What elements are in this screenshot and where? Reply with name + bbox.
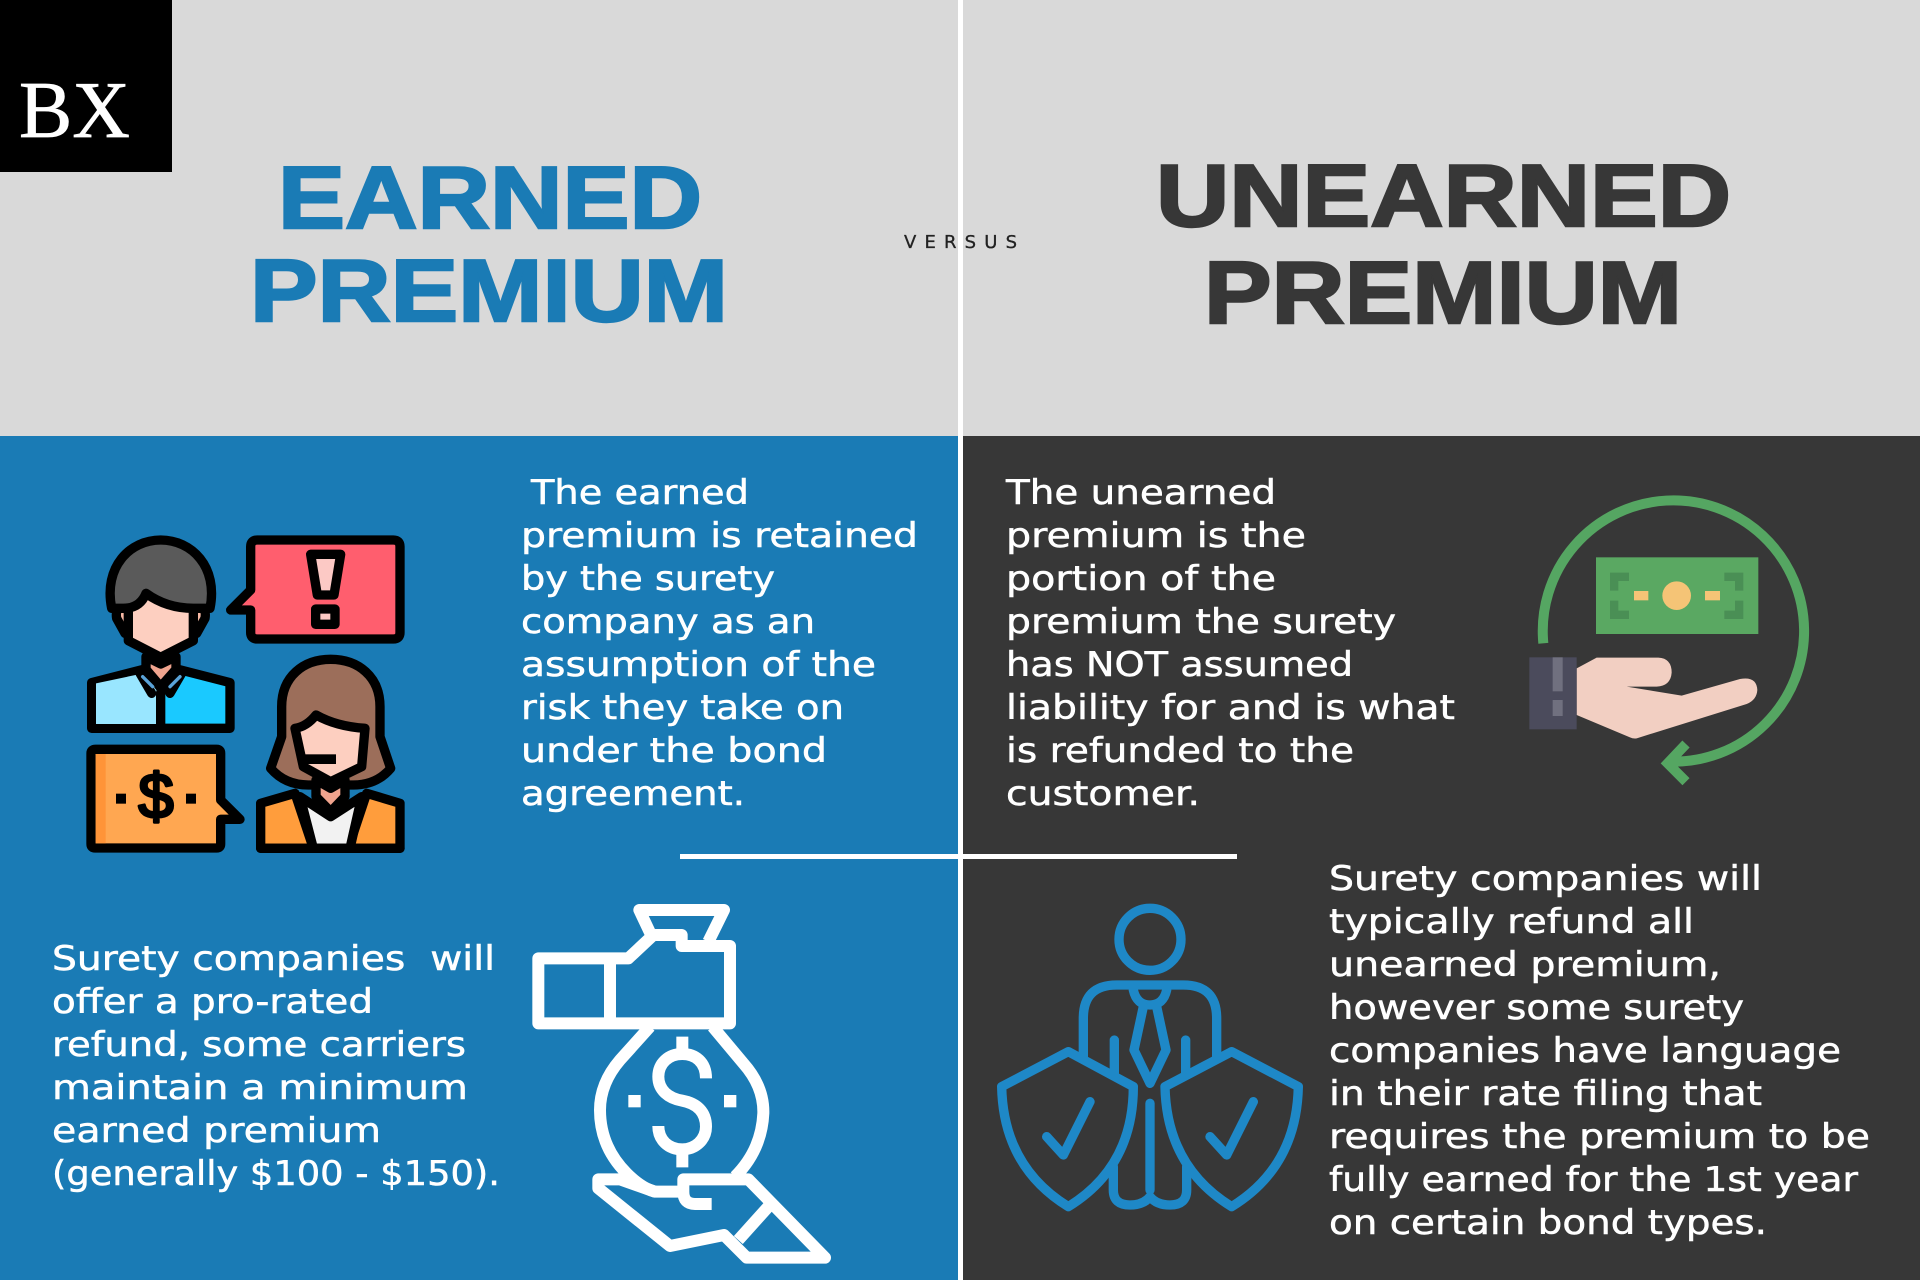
text block: unearned premium definition: liability for and is what [1006, 688, 1455, 728]
text block: earned premium retained: by the surety [521, 559, 775, 599]
text block: unearned premium definition: is refunded to the [1006, 731, 1354, 771]
icon: money bill in open hand with return arrow [1529, 500, 1804, 782]
header background [0, 0, 1920, 436]
text block: earned premium retained [521, 473, 918, 814]
text block: unearned premium definition: portion of the [1006, 559, 1276, 599]
logo: BX [0, 0, 172, 172]
panel: unearned premium [962, 436, 1920, 1280]
text block: pro-rated refund: maintain a minimum [52, 1068, 468, 1108]
text block: unearned premium definition: customer. [1006, 774, 1200, 814]
icon: money bag held between two hands [538, 910, 825, 1258]
heading: earned premium: PREMIUM [250, 241, 728, 340]
versus label: VERSUS [904, 232, 1017, 253]
icon: two people talking with speech bubbles: $ [138, 762, 174, 832]
text block: refund of unearned premium: companies have language [1329, 1031, 1841, 1071]
text block: pro-rated refund: earned premium [52, 1111, 381, 1151]
text block: pro-rated refund: Surety companies will [52, 939, 495, 979]
text block: refund of unearned premium: however some surety [1329, 988, 1744, 1028]
text block: earned premium retained: The earned [530, 473, 749, 513]
text block: refund of unearned premium: in their rate filing that [1329, 1074, 1762, 1114]
text block: earned premium retained: risk they take on [521, 688, 844, 728]
heading: earned premium [250, 148, 728, 340]
text block: pro-rated refund: offer a pro-rated [52, 982, 373, 1022]
text block: unearned premium definition: premium is the [1006, 516, 1306, 556]
text block: earned premium retained: premium is retained [521, 516, 918, 556]
text block: earned premium retained: agreement. [521, 774, 745, 814]
text block: pro-rated refund [52, 939, 500, 1194]
text block: refund of unearned premium: typically refund all [1329, 902, 1694, 942]
text block: unearned premium definition: has NOT assumed [1006, 645, 1353, 685]
heading: unearned premium: UNEARNED [1156, 146, 1731, 245]
heading: earned premium: EARNED [278, 148, 702, 247]
icon: businessman with two check shields [1002, 908, 1298, 1207]
text block: pro-rated refund: refund, some carriers [52, 1025, 466, 1065]
text block: refund of unearned premium: on certain bond types. [1329, 1203, 1767, 1243]
text block: earned premium retained: assumption of the [521, 645, 876, 685]
icon: two people talking with speech bubbles [91, 540, 400, 848]
text block: unearned premium definition [1005, 473, 1455, 814]
text block: refund of unearned premium: Surety companies will [1329, 859, 1762, 899]
text block: pro-rated refund: (generally $100 - $150). [52, 1154, 500, 1194]
text block: earned premium retained: company as an [521, 602, 815, 642]
text block: refund of unearned premium: unearned premium, [1329, 945, 1721, 985]
text block: refund of unearned premium [1329, 859, 1870, 1243]
text block: refund of unearned premium: requires the premium to be [1329, 1117, 1870, 1157]
heading: unearned premium [1156, 146, 1731, 342]
logo: BX: BX [19, 67, 130, 155]
text block: unearned premium definition: The unearned [1005, 473, 1276, 513]
text block: earned premium retained: under the bond [521, 731, 827, 771]
text block: unearned premium definition: premium the surety [1006, 602, 1396, 642]
heading: unearned premium: PREMIUM [1204, 243, 1682, 342]
panel: earned premium [0, 436, 958, 1280]
text block: refund of unearned premium: fully earned for the 1st year [1329, 1160, 1858, 1200]
